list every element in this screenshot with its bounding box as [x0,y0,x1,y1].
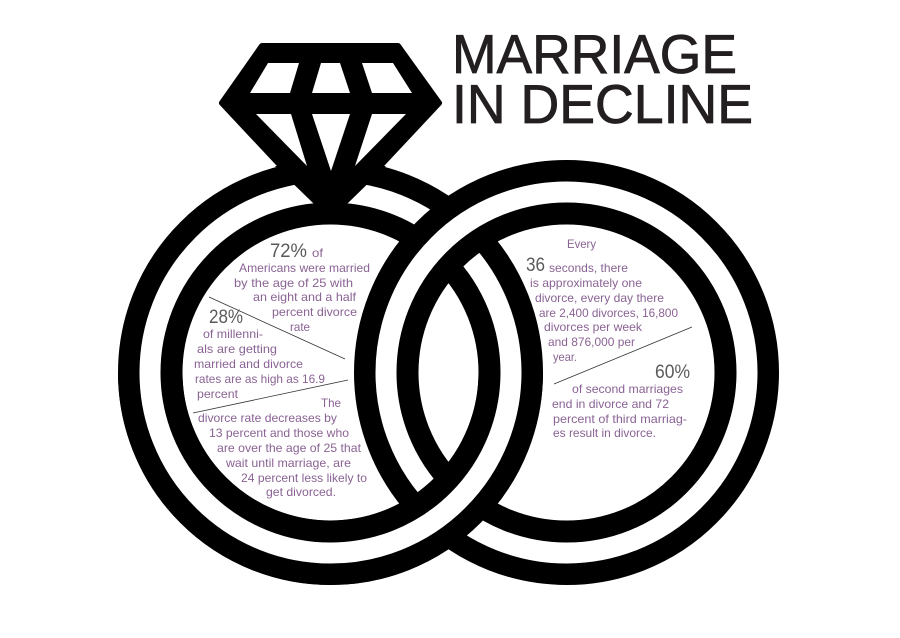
text block: divorce rate decreases [198,396,367,499]
text block: divorce rate decreases: are over the age of 25 that [217,441,362,455]
text block: every 36 seconds: is approximately one [530,276,642,290]
text block: every 36 seconds: are 2,400 divorces, 16,800 [539,306,678,320]
text block: 72 percent married by 25: an eight and a half [253,290,357,304]
title: MARRIAGE [452,23,737,85]
text block: every 36 seconds: divorce, every day there [535,291,664,305]
text block: 60 percent of second marriages: percent of third marriag- [553,412,687,426]
text block: 60 percent of second marriages [552,362,690,440]
right ring [386,192,747,553]
text block: divorce rate decreases: get divorced. [266,485,336,499]
title [452,23,753,135]
left ring [150,192,511,553]
text block: 72 percent married by 25: percent divorce [272,305,357,319]
text block: 28 percent of millennials: married and divorce [194,357,303,371]
icon: diamond [222,46,439,215]
text block: 72 percent married by 25 [234,241,370,334]
text block: divorce rate decreases: 13 percent and those who [209,426,349,440]
text block: 60 percent of second marriages: 60% [655,362,690,383]
divider line upper left [209,297,345,359]
text block: every 36 seconds: 36 [526,255,545,276]
text block: 60 percent of second marriages: es result in divorce. [553,426,656,440]
text block: 72 percent married by 25: of [312,246,324,260]
text block: 60 percent of second marriages: of second marriages [572,382,683,396]
text block: divorce rate decreases: wait until marriage, are [225,456,351,470]
text block: 28 percent of millennials: als are getting [197,342,277,356]
text block: 72 percent married by 25: rate [290,320,310,334]
text block: 28 percent of millennials: percent [197,387,239,401]
title: IN DECLINE [452,73,753,135]
text block: 28 percent of millennials: 28% [209,307,243,328]
text block: 60 percent of second marriages: end in divorce and 72 [552,397,669,411]
text block: divorce rate decreases: divorce rate decreases by [198,411,337,425]
left ring lower crossing over right ring [118,374,543,585]
text block: 72 percent married by 25: by the age of 25 with [234,276,353,290]
divider line lower left [193,380,348,413]
text block: divorce rate decreases: The [321,396,341,410]
text block: 72 percent married by 25: Americans were married [239,261,370,275]
text block: 28 percent of millennials [194,307,325,401]
text block: 28 percent of millennials: of millenni- [203,327,263,341]
text block: every 36 seconds: seconds, there [549,261,628,275]
text block: every 36 seconds: year. [553,350,577,364]
text block: every 36 seconds: and 876,000 per [548,335,635,349]
divider line right [554,327,692,384]
text block: every 36 seconds: divorces per week [544,320,643,334]
text block: 28 percent of millennials: rates are as high as 16.9 [195,372,325,386]
text block: 72 percent married by 25: 72% [270,241,307,262]
text block: every 36 seconds: Every [567,237,596,251]
text block: every 36 seconds [526,237,678,364]
text block: divorce rate decreases: 24 percent less likely to [241,471,367,485]
